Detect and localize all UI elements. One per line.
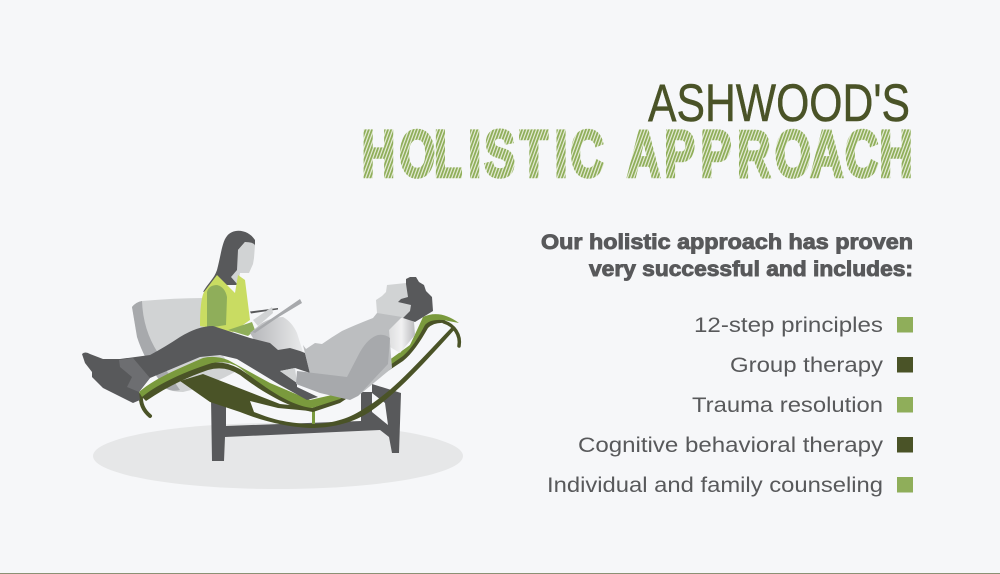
patient knee highlight bbox=[280, 368, 297, 383]
lounge base bbox=[211, 384, 401, 461]
intro text bbox=[541, 231, 913, 281]
footrest hook bbox=[141, 394, 150, 416]
pillow bbox=[388, 317, 415, 353]
list item: group therapy: Group therapy bbox=[730, 354, 884, 377]
illustration: therapy session bbox=[82, 231, 463, 489]
lounge frame rails bbox=[180, 327, 455, 428]
intro line 2: very successful and includes: bbox=[589, 258, 913, 281]
patient head bbox=[376, 283, 414, 318]
title bbox=[362, 74, 913, 191]
therapist face bbox=[231, 242, 255, 285]
bent knee bbox=[250, 317, 303, 352]
floor shadow bbox=[93, 423, 463, 489]
patient torso bbox=[303, 313, 402, 396]
therapist arm bbox=[207, 285, 227, 328]
list item: 12-step: 12-step principles bbox=[694, 314, 883, 337]
pen bbox=[250, 308, 278, 314]
chair back edge bbox=[132, 301, 180, 391]
list item: individual and family counseling: Individual and family counseling bbox=[547, 474, 883, 497]
patient arm bbox=[296, 335, 390, 400]
patient trousers bbox=[82, 326, 318, 403]
lounge cushion bbox=[139, 314, 459, 408]
headrest hook bbox=[444, 322, 459, 346]
rail strut bbox=[312, 408, 315, 424]
therapist vest bbox=[200, 275, 250, 332]
chair back behind therapist bbox=[132, 298, 235, 392]
list of therapies bbox=[547, 314, 913, 497]
title line: Holistic Approach: HOLISTIC APPROACH bbox=[362, 117, 913, 191]
patient sock bbox=[119, 358, 150, 392]
list item: cognitive behavioral therapy: Cognitive behavioral therapy bbox=[578, 434, 884, 457]
patient hair bbox=[398, 277, 433, 322]
therapist hand bbox=[228, 322, 255, 336]
list item: trauma resolution: Trauma resolution bbox=[692, 394, 883, 417]
clipboard bbox=[252, 299, 302, 333]
therapist hair bbox=[203, 231, 255, 292]
lounge cushion underside bbox=[141, 320, 445, 412]
intro line 1: Our holistic approach has proven bbox=[541, 231, 913, 254]
clipboard paper bbox=[253, 307, 273, 326]
title line: Ashwood's: ASHWOOD'S bbox=[648, 74, 910, 133]
